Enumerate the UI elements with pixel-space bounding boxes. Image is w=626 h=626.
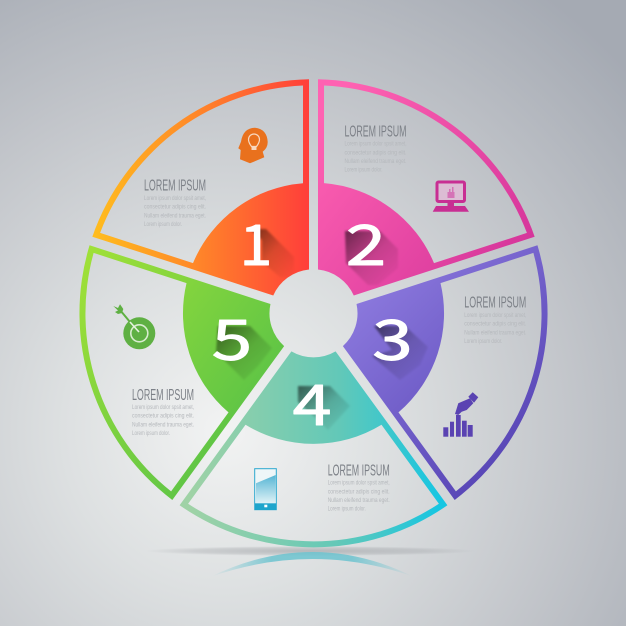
text block 1: Nullam eleifend trauma eget. [144, 212, 206, 219]
number 1 shadow [250, 229, 294, 277]
text block 2: Lorem ipsum dolor. [344, 167, 383, 174]
text block 2: LOREM IPSUM [344, 123, 406, 140]
text block 4: Nullam eleifend trauma eget. [328, 497, 390, 504]
segment 1 shape [92, 79, 309, 296]
number 2: 2 [346, 200, 386, 281]
text block 3: Nullam eleifend trauma eget. [464, 329, 526, 336]
text block 5: Lorem ipsum dolor spsit amet, [132, 404, 194, 411]
text block 2 [344, 123, 407, 174]
number 4 shadow [298, 386, 350, 430]
text block 2: Nullam eleifend trauma eget. [344, 158, 407, 165]
icon: target with dart [113, 304, 155, 349]
wheel reflection [210, 552, 414, 577]
text block 3 [464, 295, 526, 345]
text block 5: Lorem ipsum dolor. [132, 430, 170, 437]
segment 3 shape [328, 198, 626, 500]
text block 5: LOREM IPSUM [132, 387, 194, 404]
text block 4: Lorem ipsum dolor spsit amet, [328, 480, 390, 487]
text block 4: Lorem ipsum dolor. [328, 506, 366, 513]
panel: segment 4 [180, 330, 482, 626]
text block 4 [328, 462, 390, 513]
text block 3: Lorem ipsum dolor spsit amet, [464, 312, 526, 319]
text block 3: Lorem ipsum dolor. [464, 338, 502, 345]
number 3: 3 [372, 295, 413, 376]
panel: segment 5 [23, 245, 295, 518]
icon: hand and bars [443, 392, 478, 437]
text block 1: LOREM IPSUM [144, 178, 206, 195]
number 4: 4 [293, 361, 331, 442]
text block 2: consectetur adipis cing elit. [344, 149, 407, 156]
panel: segment 3 [328, 198, 626, 500]
text block 2: Lorem ipsum dolor spsit amet, [344, 141, 407, 148]
floor shadow [145, 546, 475, 556]
text block 5: Nullam eleifend trauma eget. [132, 421, 194, 428]
segment 5 shape [23, 245, 295, 518]
text block 5 [132, 387, 194, 437]
icon: head with bulb [238, 128, 268, 163]
number 5 shadow [216, 326, 272, 380]
number 1: 1 [240, 200, 272, 282]
text block 5: consectetur adipis cing elit. [132, 413, 194, 420]
text block 1: consectetur adipis cing elit. [144, 204, 206, 211]
panel: segment 1 [92, 79, 309, 296]
text block 4: consectetur adipis cing elit. [328, 488, 390, 495]
segment 2 shape [262, 31, 535, 304]
number 3 shadow [372, 326, 428, 380]
text block 3: LOREM IPSUM [464, 295, 526, 312]
text block 1: Lorem ipsum dolor. [144, 221, 182, 228]
text block 1: Lorem ipsum dolor spsit amet, [144, 195, 206, 202]
text block 4: LOREM IPSUM [328, 462, 390, 479]
number 5: 5 [212, 295, 252, 376]
segment 4 shape [180, 330, 482, 626]
icon: monitor [433, 182, 469, 212]
panel: segment 2 [262, 31, 535, 304]
text block 1 [144, 178, 206, 228]
icon: phone [255, 469, 276, 510]
text block 3: consectetur adipis cing elit. [464, 321, 526, 328]
number 2 shadow [345, 231, 398, 285]
